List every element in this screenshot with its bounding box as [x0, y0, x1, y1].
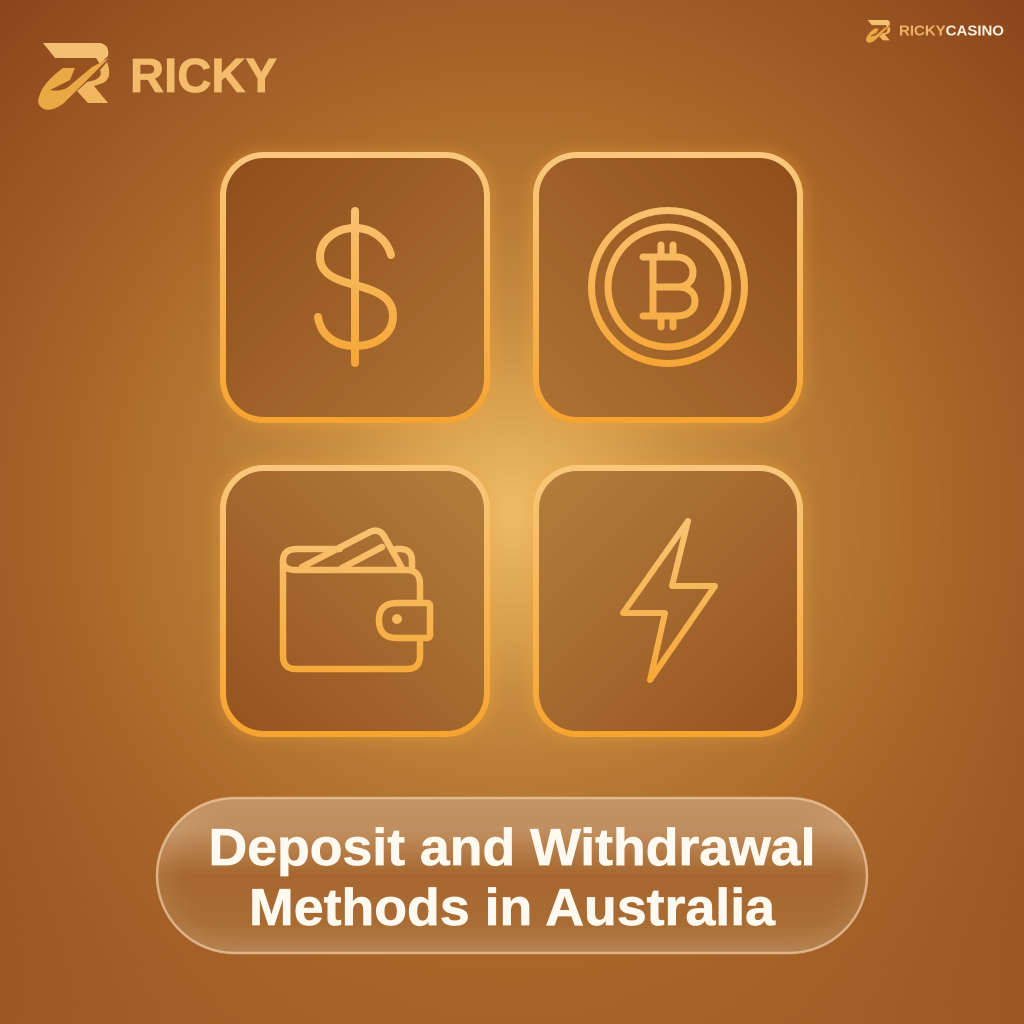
title text: Methods in Australia: [249, 879, 776, 937]
card: [223, 468, 487, 734]
logo: Ricky Casino small: [866, 20, 1004, 43]
icon: bitcoin coin: [592, 210, 744, 364]
card: [536, 468, 800, 734]
title text: Deposit and Withdrawal: [208, 819, 816, 877]
title pill: [157, 798, 867, 953]
panel: e-wallet: [223, 468, 487, 734]
title text: [208, 819, 816, 937]
icon: dollar sign: [318, 211, 393, 363]
wordmark: RICKYCASINO: RICKYCASINO: [899, 24, 1004, 40]
card: [223, 155, 487, 420]
pill inner glow: [157, 798, 867, 953]
glow behind cards: [218, 152, 805, 739]
card: [536, 155, 800, 420]
panel: fast payments: [536, 468, 800, 734]
panel: fiat currency: [223, 155, 487, 420]
icon: wallet: [283, 531, 430, 669]
pill background: [157, 798, 867, 953]
icon: lightning bolt: [623, 521, 715, 680]
wordmark: RICKY: RICKY: [130, 50, 277, 103]
logo: Ricky main: [38, 43, 277, 110]
panel: cryptocurrency: [536, 155, 800, 420]
icon: small R mark: [866, 20, 890, 43]
icon: Ricky R mark: [38, 43, 109, 110]
